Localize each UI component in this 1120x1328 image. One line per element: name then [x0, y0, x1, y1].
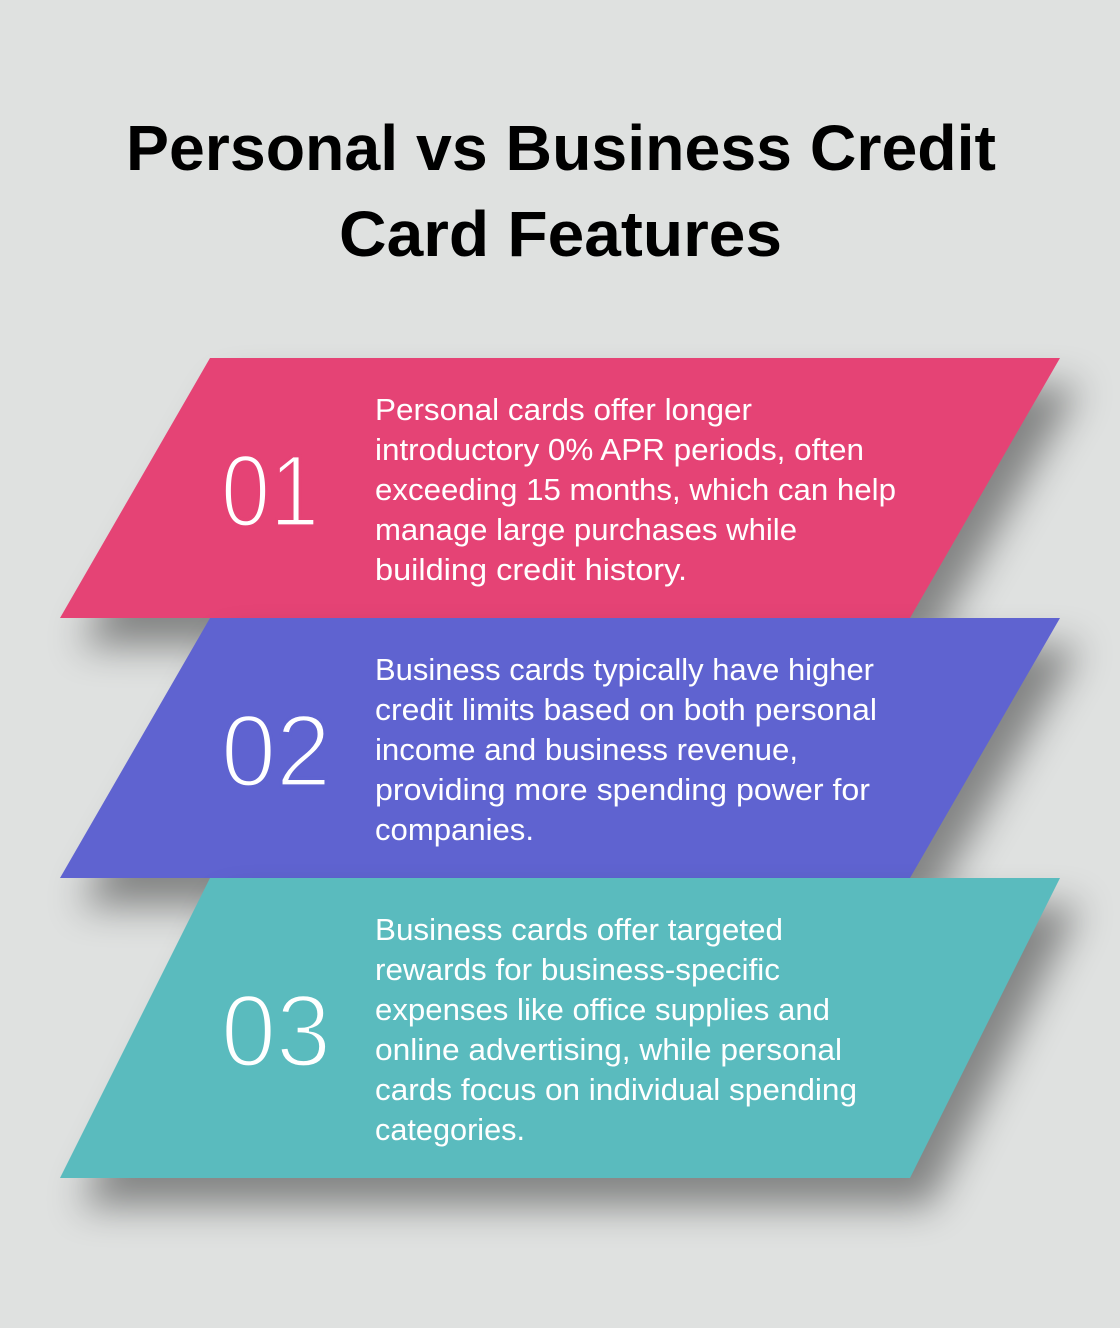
panel: feature 03: [60, 878, 1060, 1178]
text: feature 03 description: online advertising, while personal: [375, 1033, 842, 1067]
title: [126, 112, 996, 270]
text: feature 01 description: building credit history.: [375, 553, 687, 587]
text: feature 03 description: [375, 913, 857, 1147]
text: feature 03 description: rewards for business-specific: [375, 953, 780, 987]
number 01: 01: [221, 434, 319, 548]
text: feature 01 description: introductory 0% APR periods, often: [375, 433, 864, 467]
panel: feature 01: [60, 358, 1060, 618]
number 03: 03: [221, 974, 331, 1088]
number 02: 02: [221, 694, 331, 808]
text: feature 01 description: Personal cards offer longer: [375, 393, 752, 427]
purple parallelogram: [60, 618, 1060, 878]
text: feature 01 description: [375, 393, 896, 587]
text: feature 02 description: Business cards typically have higher: [375, 653, 874, 687]
text: feature 02 description: providing more spending power for: [375, 773, 870, 807]
text: feature 03 description: Business cards offer targeted: [375, 913, 783, 947]
panel: feature 02: [60, 618, 1060, 878]
text: feature 02 description: income and business revenue,: [375, 733, 798, 767]
text: feature 01 description: exceeding 15 months, which can help: [375, 473, 896, 507]
text: feature 02 description: companies.: [375, 813, 534, 847]
text: feature 01 description: manage large purchases while: [375, 513, 797, 547]
text: feature 03 description: categories.: [375, 1113, 525, 1147]
text: feature 03 description: expenses like office supplies and: [375, 993, 830, 1027]
title: Card Features: [339, 198, 782, 270]
text: feature 02 description: credit limits based on both personal: [375, 693, 877, 727]
title: Personal vs Business Credit: [126, 112, 996, 184]
teal parallelogram: [60, 878, 1060, 1178]
text: feature 02 description: [375, 653, 877, 847]
pink parallelogram: [60, 358, 1060, 618]
text: feature 03 description: cards focus on individual spending: [375, 1073, 857, 1107]
